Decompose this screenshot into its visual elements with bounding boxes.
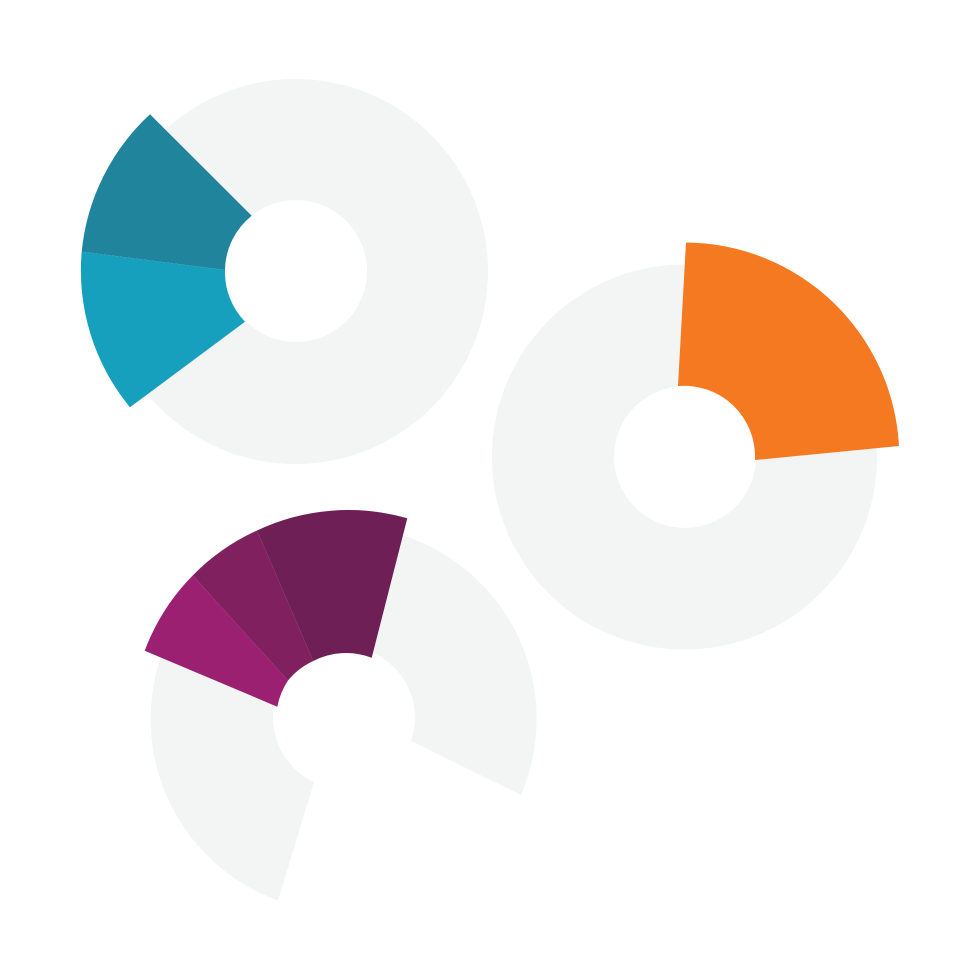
segment: medium purple: [193, 530, 313, 680]
donut chart: orange: [492, 242, 899, 650]
segment: orange: [678, 242, 899, 460]
segment: light purple: [145, 576, 288, 707]
donut track: purple chart with gap: [151, 526, 537, 900]
donut chart: purple: [145, 510, 537, 900]
donut chart: teal: [81, 79, 488, 464]
segment: dark purple: [257, 510, 407, 661]
donut track: orange chart: [492, 264, 877, 650]
segment: dark teal: [82, 114, 252, 270]
segment: light teal: [81, 252, 245, 407]
donut track: teal chart: [103, 79, 488, 464]
